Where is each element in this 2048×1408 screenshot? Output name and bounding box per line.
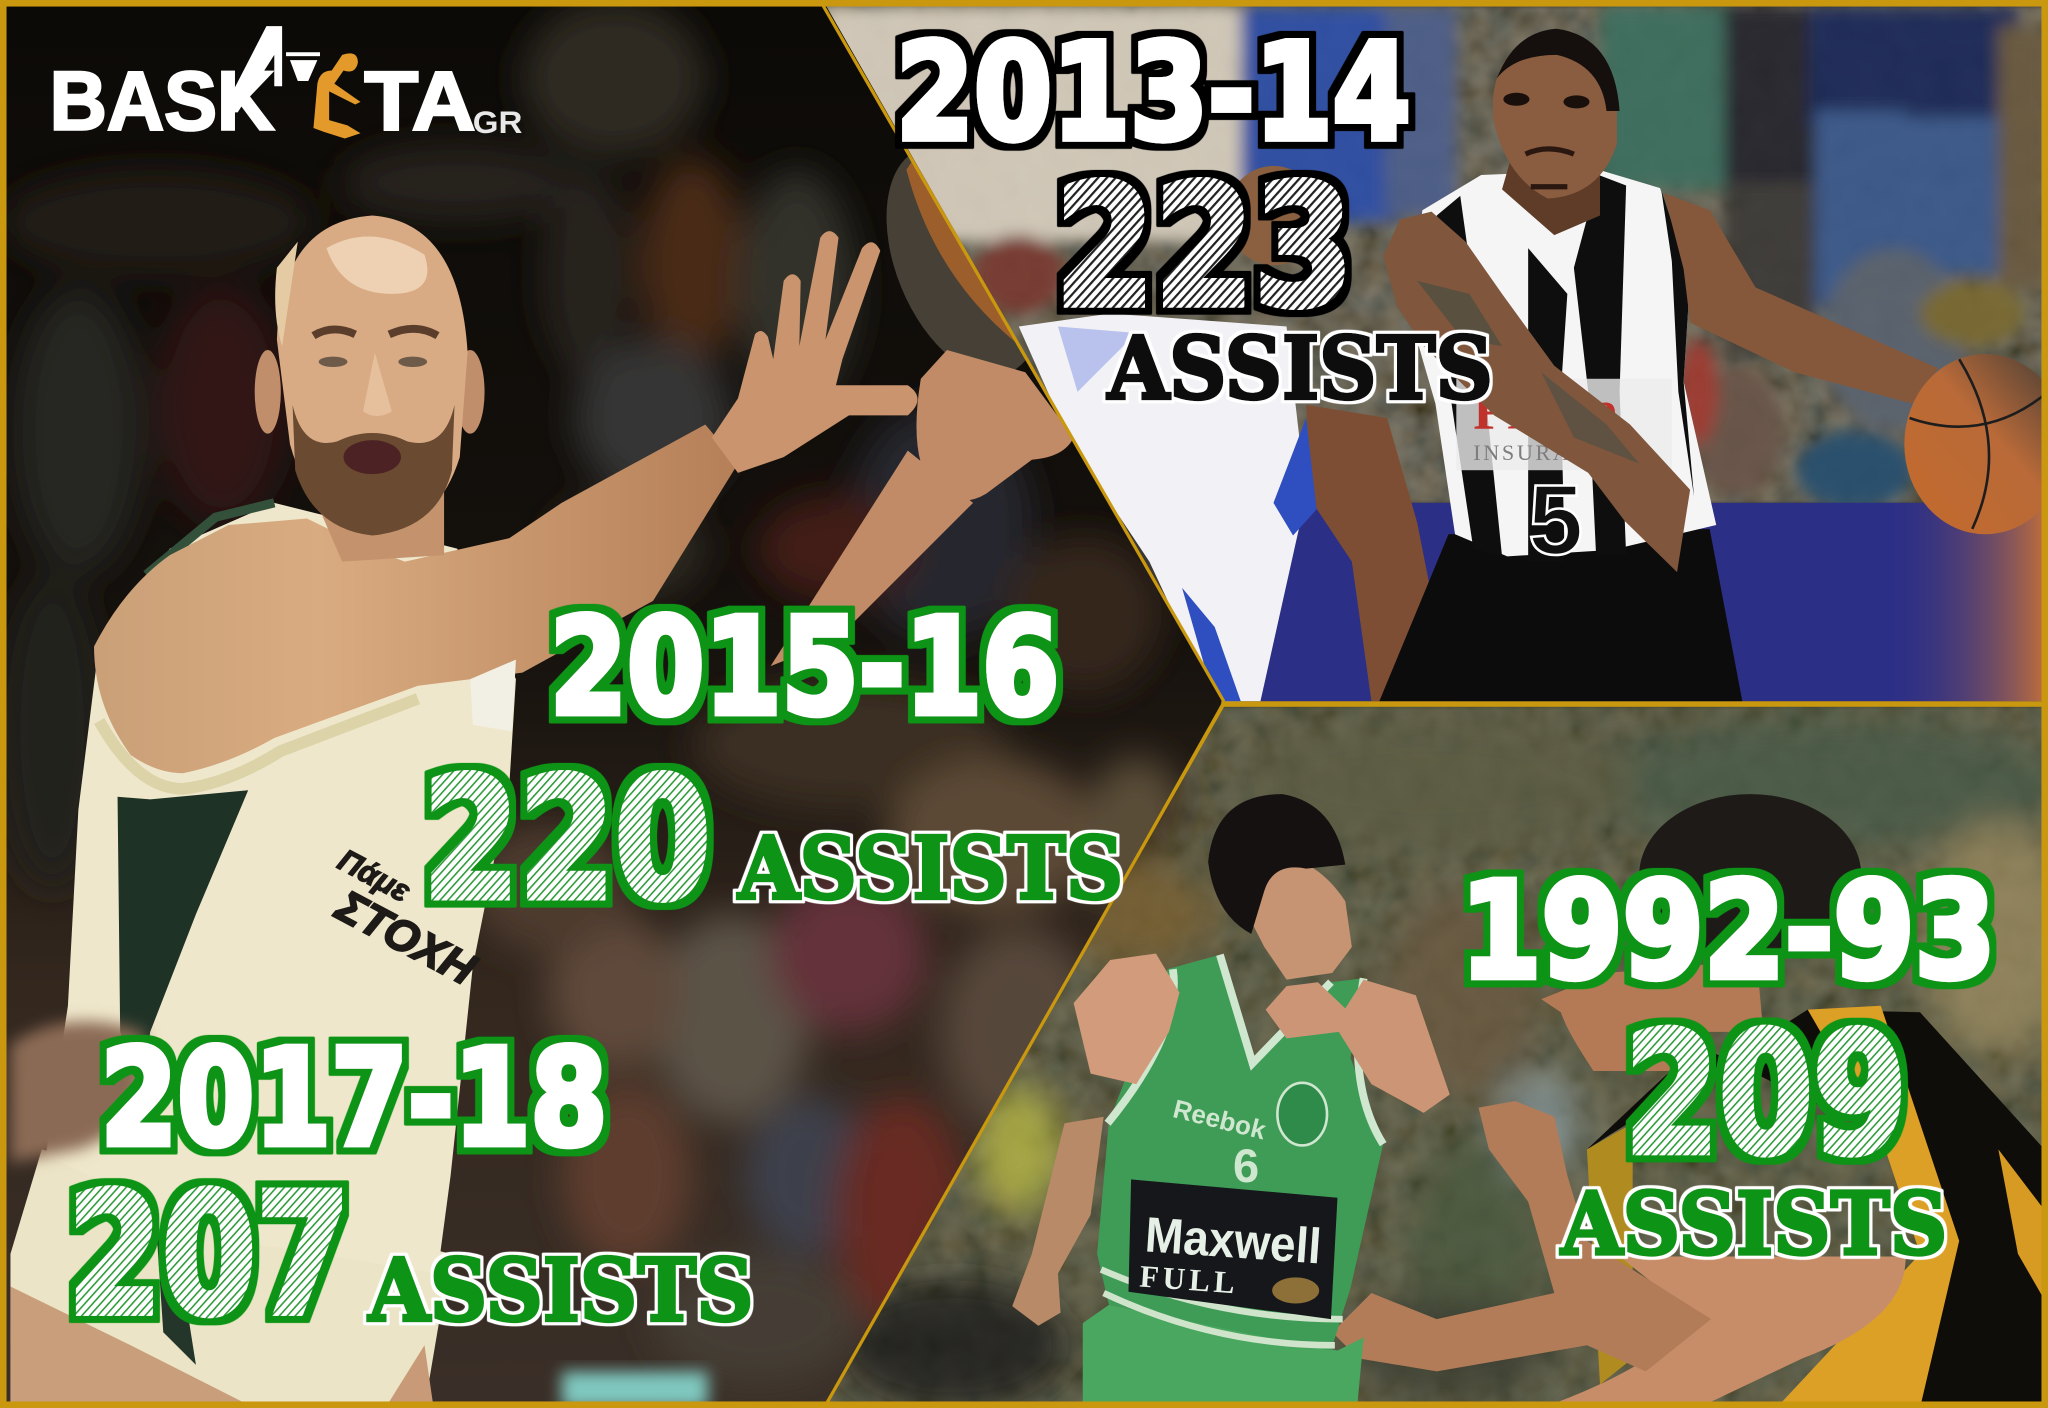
sponsor bbox=[1128, 1179, 1337, 1319]
head bbox=[255, 216, 485, 536]
divider: upper diagonal bbox=[823, 5, 1224, 701]
divider: horizontal bbox=[1221, 701, 2048, 707]
assists label: ASSISTS bbox=[1560, 1174, 1947, 1275]
head bbox=[1493, 29, 1620, 235]
jersey logo bbox=[310, 842, 499, 995]
jersey green side panel bbox=[118, 790, 248, 1097]
assists label: ASSISTS bbox=[737, 819, 1123, 920]
assist count: 220 bbox=[423, 743, 711, 937]
opponent arm bbox=[1541, 1256, 1906, 1408]
assist count: 209 bbox=[1625, 998, 1907, 1192]
assist count: 207 bbox=[68, 1159, 350, 1353]
hem stripes bbox=[1101, 1270, 1343, 1345]
upper hand bbox=[712, 231, 918, 473]
divider: lower diagonal bbox=[825, 704, 1224, 1405]
sponsor: FULL bbox=[1138, 1259, 1240, 1300]
sponsor: 5 bbox=[1528, 465, 1583, 576]
assists label: ASSISTS bbox=[367, 1240, 754, 1341]
basketball behind hand bbox=[886, 154, 1026, 370]
year: 2017-18 bbox=[101, 1021, 607, 1176]
panel: 1992-93 Galis photo bbox=[823, 707, 2048, 1408]
logo: TA bbox=[364, 53, 475, 147]
team patch bbox=[470, 660, 516, 731]
left arm bbox=[1383, 212, 1690, 572]
jersey text and badge: Reebok bbox=[1170, 1093, 1269, 1145]
advertising board bbox=[1215, 503, 2048, 701]
neck trim bbox=[1108, 955, 1383, 1144]
neck bbox=[308, 483, 444, 562]
jersey bbox=[46, 503, 516, 1273]
assist count: 223 bbox=[1055, 150, 1353, 344]
logo bbox=[50, 26, 522, 147]
basketball bbox=[1904, 354, 2048, 534]
year: 2013-14 bbox=[896, 15, 1411, 170]
jersey trim bbox=[99, 699, 418, 789]
black stripes bbox=[1437, 175, 1694, 562]
opponent forearm and hand bbox=[1332, 1101, 1711, 1371]
shorts bbox=[1379, 529, 1742, 701]
season 2015-16 stat bbox=[423, 590, 1123, 937]
sponsor: INSURANCE bbox=[1473, 440, 1624, 465]
jersey bbox=[1097, 955, 1383, 1351]
shoulder strap green bbox=[146, 503, 274, 575]
sponsor: Maxwell bbox=[1143, 1206, 1323, 1275]
icon: hoop bbox=[222, 26, 320, 112]
sponsor: Prime bbox=[1473, 379, 1616, 440]
background player arm bbox=[1012, 1117, 1104, 1326]
right arm bbox=[1664, 193, 1938, 404]
jersey logo: Πάμε bbox=[332, 842, 417, 909]
season 1992-93 stat bbox=[1460, 854, 1996, 1275]
assists label: ASSISTS bbox=[1107, 318, 1493, 419]
year: 2015-16 bbox=[550, 590, 1059, 745]
bottom arm bbox=[10, 1287, 255, 1408]
jersey logo: ΣΤΟΧΗ bbox=[327, 881, 484, 995]
jersey text and badge bbox=[1170, 1083, 1327, 1192]
shorts bbox=[10, 1149, 451, 1408]
opposing player bbox=[1019, 166, 1452, 701]
panel: 2015-16 and 2017-18 Calathes photo bbox=[0, 0, 1233, 1408]
sponsor bbox=[1456, 379, 1672, 576]
lower hand blur bbox=[10, 1021, 146, 1162]
opponent head bbox=[1541, 794, 1861, 1071]
right arm and hand bbox=[1266, 980, 1450, 1113]
icon: orange dunking figure bbox=[313, 53, 360, 138]
shorts dark panel bbox=[157, 1234, 196, 1365]
opponent jersey bbox=[1587, 1006, 2048, 1408]
head bbox=[1208, 794, 1352, 980]
season 2013-14 stat bbox=[896, 15, 1493, 419]
jersey text and badge: 6 bbox=[1233, 1139, 1259, 1192]
logo: GR bbox=[473, 105, 522, 140]
panel: 2013-14 Pantelis photo bbox=[823, 7, 2048, 701]
sign teal bbox=[562, 1371, 708, 1408]
bottom hand bbox=[385, 1345, 434, 1408]
logo: BASK bbox=[50, 53, 274, 147]
season 2017-18 stat bbox=[68, 1021, 754, 1353]
left arm and hand bbox=[1074, 953, 1179, 1084]
shorts bbox=[1083, 1305, 1364, 1408]
jersey bbox=[1409, 170, 1716, 556]
main arm bbox=[94, 424, 738, 773]
far forearm and hand bbox=[771, 350, 1074, 666]
